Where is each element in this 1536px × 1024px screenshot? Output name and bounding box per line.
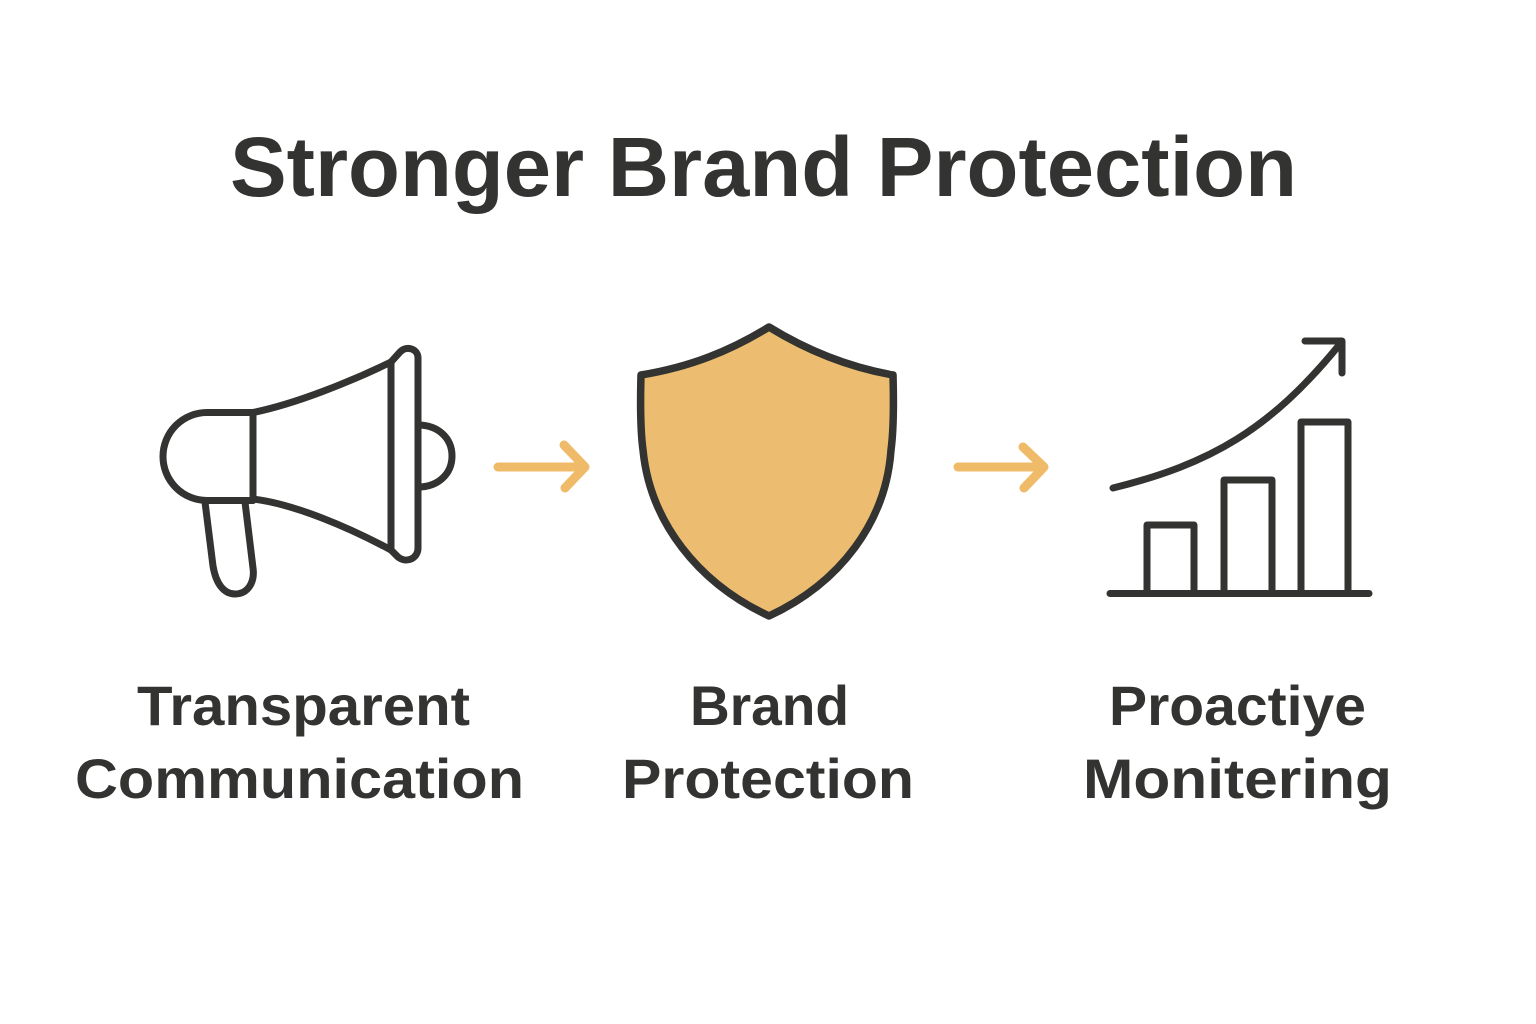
chart bars (1147, 422, 1348, 593)
label: Proactiye Monitering: Monitering (1083, 747, 1392, 810)
icon: growth chart (1110, 341, 1369, 594)
title: Stronger Brand Protection (230, 120, 1297, 214)
label: Transparent Communication: Communication (75, 747, 524, 810)
icon: shield (641, 327, 893, 616)
icon: megaphone (163, 348, 452, 594)
label: Brand Protection: Brand (690, 674, 849, 737)
label: Transparent Communication: Transparent (137, 674, 470, 737)
label: Transparent Communication (75, 674, 524, 810)
arrow: communication to protection (498, 445, 585, 488)
arrow: protection to monitoring (958, 447, 1044, 488)
label: Brand Protection (622, 674, 914, 810)
label: Brand Protection: Protection (622, 747, 914, 810)
chart baseline (1110, 590, 1369, 597)
label: Proactiye Monitering (1083, 674, 1392, 810)
label: Proactiye Monitering: Proactiye (1109, 674, 1366, 737)
rising arrow (1113, 341, 1342, 488)
